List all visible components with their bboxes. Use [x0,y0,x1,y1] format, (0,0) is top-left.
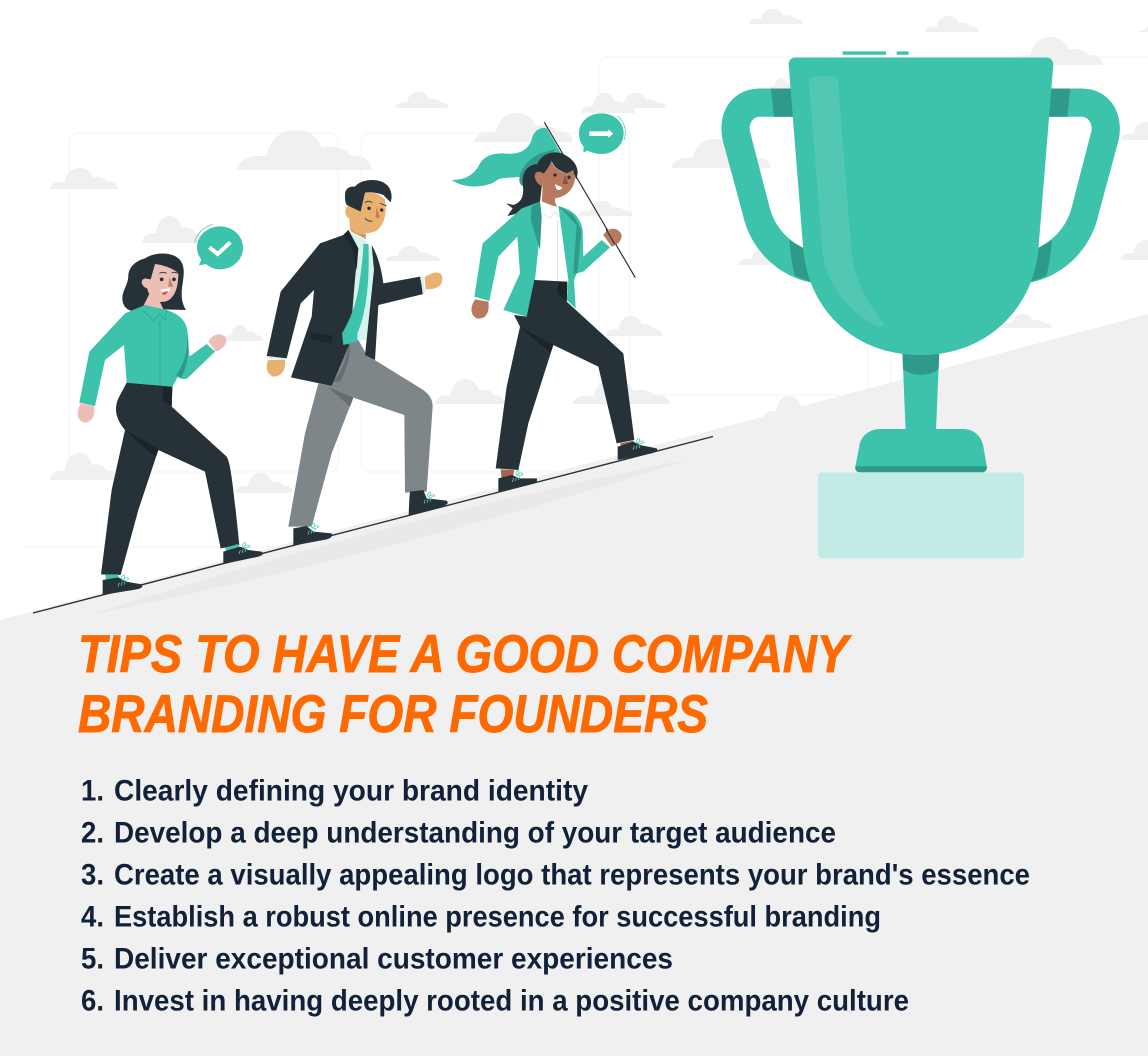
head [506,149,578,216]
person: woman with flag [452,113,657,492]
tip 1: Clearly defining your brand identity [114,774,589,808]
hill slope [0,314,1148,1056]
shoes [105,544,240,582]
tip 6: Invest in having deeply rooted in a positive company culture [114,984,909,1018]
tips list [81,774,1030,1018]
trophy cup [789,58,1053,355]
trousers [288,340,433,527]
tip 2: 2. [81,816,104,850]
tip 2: Develop a deep understanding of your target audience [114,816,836,850]
speech bubble: arrow [579,113,625,154]
tip 5: 5. [81,942,104,976]
title [78,625,852,744]
jacket [474,202,542,317]
ground line [33,436,713,613]
trophy stem [902,350,939,431]
hands [471,229,622,319]
hill shadow [90,458,695,615]
tip 6: 6. [81,984,104,1018]
right handle [1028,88,1120,283]
background clouds [50,9,1148,493]
head [122,254,186,318]
tip 5: Deliver exceptional customer experiences [114,942,673,976]
flag [452,128,564,186]
tip 4: Establish a robust online presence for successful branding [114,900,881,934]
tie [342,244,369,345]
left handle [721,88,813,283]
tip 1: 1. [81,774,104,808]
shirt [349,230,378,340]
speech bubble: check [195,224,243,269]
title: BRANDING FOR FOUNDERS [78,685,708,744]
shoes [501,441,633,479]
blouse [535,201,573,282]
title: TIPS TO HAVE A GOOD COMPANY [78,625,852,684]
shoes [293,490,448,546]
cup highlight [809,76,883,327]
tip 3: 3. [81,858,104,892]
pedestal [818,472,1024,558]
hands [267,272,442,377]
person: woman in teal shirt [78,224,263,595]
person: man in dark suit [267,180,448,546]
hands [78,334,226,423]
shirt [79,305,189,406]
trousers [496,280,634,470]
head [345,180,392,239]
jacket [267,230,358,386]
pants [101,383,239,575]
flag pole [544,122,635,278]
tip 4: 4. [81,900,104,934]
trophy sparkle lines [843,51,909,55]
tip 3: Create a visually appealing logo that represents your brand's essence [114,858,1030,892]
trophy [721,51,1120,558]
trophy foot [855,429,987,472]
background panels [22,57,1148,547]
